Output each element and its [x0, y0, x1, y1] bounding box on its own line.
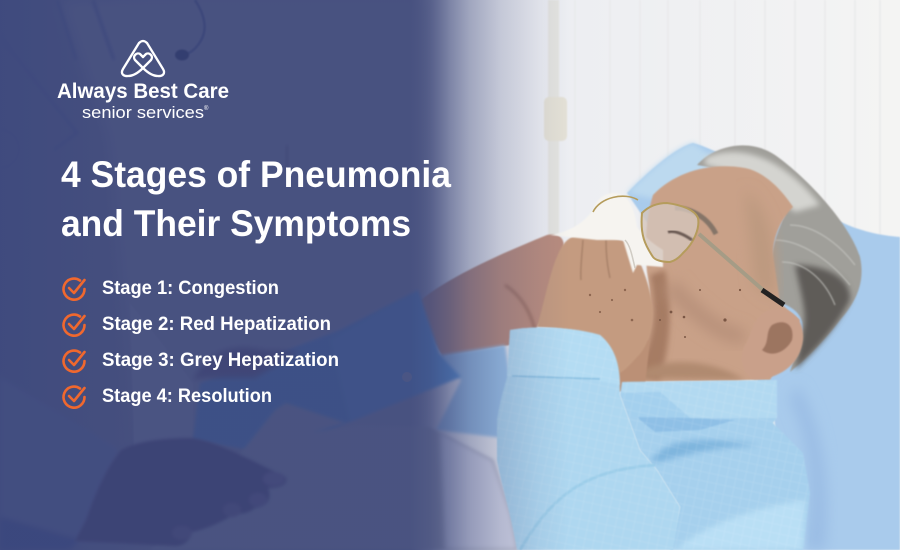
- light column behind the arm: [130, 303, 193, 447]
- icon: orange check: [64, 351, 85, 372]
- ear: [742, 309, 803, 380]
- patient's left arm shirt behind: [436, 345, 520, 440]
- hand rear: [421, 234, 564, 357]
- icon: orange check: [64, 279, 85, 300]
- label: Stage 1: Congestion: [102, 278, 279, 299]
- title: 4 Stages of Pneumonia: [61, 154, 451, 195]
- item: stage 3: [64, 350, 339, 372]
- glasses: [593, 196, 784, 305]
- carer's other hand, faint: [193, 348, 300, 380]
- label: Stage 3: Grey Hepatization: [102, 350, 339, 371]
- item: stage 4: [64, 386, 272, 408]
- title: and Their Symptoms: [61, 203, 411, 244]
- age spots: [659, 289, 741, 338]
- label: Stage 2: Red Hepatization: [102, 314, 331, 335]
- shirt: sleeve and cuff: [497, 327, 680, 550]
- checklist of stages: [64, 278, 339, 408]
- carer's coat and stethoscope, seen through the overlay: [0, 0, 420, 440]
- item: stage 1: [64, 278, 279, 300]
- icon: orange check: [64, 315, 85, 336]
- label: Stage 4: Resolution: [102, 386, 272, 407]
- logo: Always Best Care senior services: [57, 41, 229, 122]
- icon: orange check: [64, 387, 85, 408]
- tagline: senior services: [82, 103, 204, 122]
- patient's far sleeve cuff: [193, 290, 461, 450]
- carer's hand on the bed: [75, 438, 286, 546]
- registered mark: ®: [204, 105, 209, 112]
- face: [622, 166, 800, 382]
- title: [61, 154, 451, 244]
- item: stage 2: [64, 314, 331, 336]
- icon: house and heart: [122, 41, 164, 76]
- shirt: torso: [620, 380, 810, 550]
- brow: [675, 208, 716, 234]
- pillow: [627, 143, 900, 550]
- hair: [697, 145, 862, 372]
- carer's body panel, lower left: [0, 377, 118, 540]
- wordmark: Always Best Care: [57, 80, 229, 103]
- hand front: [537, 236, 653, 373]
- skin patch between hand and collar: [610, 340, 650, 392]
- blanket: [150, 403, 518, 550]
- tissue: [550, 193, 663, 273]
